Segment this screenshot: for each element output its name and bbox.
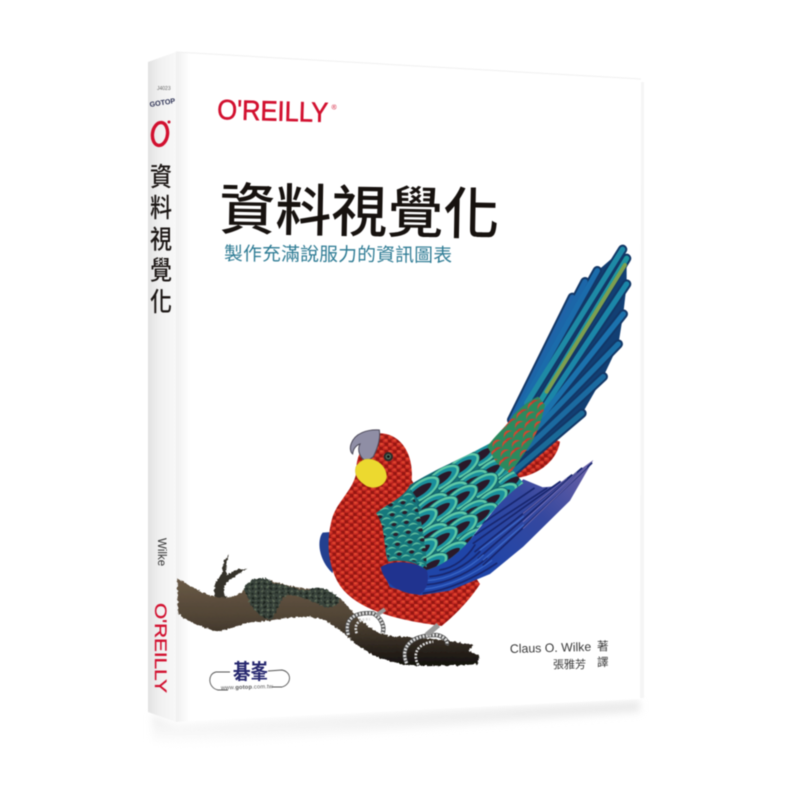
branch body — [177, 578, 479, 666]
spine title: 資 — [150, 163, 172, 193]
spine title: 料 — [150, 194, 172, 224]
rear blue wing tip — [319, 532, 336, 573]
title: 資料視覺化 — [219, 178, 500, 246]
blue wing feathers — [381, 460, 593, 595]
book cover — [148, 52, 641, 722]
spine publisher GOTOP: GOTOP — [149, 96, 176, 109]
spine text — [149, 86, 176, 693]
illustration: branch — [177, 554, 479, 666]
twig — [214, 554, 247, 599]
logo characters: 碁峯 — [233, 659, 268, 684]
spine author: Wilke — [155, 538, 167, 566]
author name: Claus O. Wilke — [510, 640, 592, 656]
teal wing coverts — [384, 443, 524, 570]
logo URL: www.gotop.com.tw — [220, 684, 274, 692]
eye — [384, 452, 393, 461]
yellow cheek — [355, 459, 387, 488]
spine title: 化 — [150, 288, 172, 317]
tail feathers — [512, 249, 627, 472]
book spine — [148, 52, 176, 722]
spine title: 覺 — [150, 257, 172, 286]
book shadow — [152, 82, 644, 746]
spine title: 視 — [150, 226, 172, 255]
spine O logo — [151, 120, 170, 146]
front cover — [176, 52, 641, 722]
spine O'REILLY: O'REILLY — [151, 603, 169, 693]
moss — [243, 578, 339, 619]
tail base wedge — [510, 250, 627, 473]
author role: 著 — [597, 639, 608, 653]
rump scales — [487, 397, 545, 473]
translator role: 譯 — [597, 655, 608, 669]
registered mark: ® — [331, 103, 337, 111]
publisher logo: gotop — [210, 659, 290, 692]
publisher logo: O'REILLY: O'REILLY — [217, 94, 329, 128]
red rump — [510, 433, 560, 478]
spine code: J4023 — [157, 86, 171, 92]
author credits — [510, 639, 608, 671]
parrot body — [329, 433, 480, 626]
parrot feet — [347, 609, 447, 665]
small shoulder scales — [376, 488, 427, 567]
subtitle: 製作充滿說服力的資訊圖表 — [224, 243, 452, 266]
beak — [350, 430, 380, 462]
translator name: 張雅芳 — [553, 658, 586, 671]
illustration: parrot — [319, 249, 627, 626]
